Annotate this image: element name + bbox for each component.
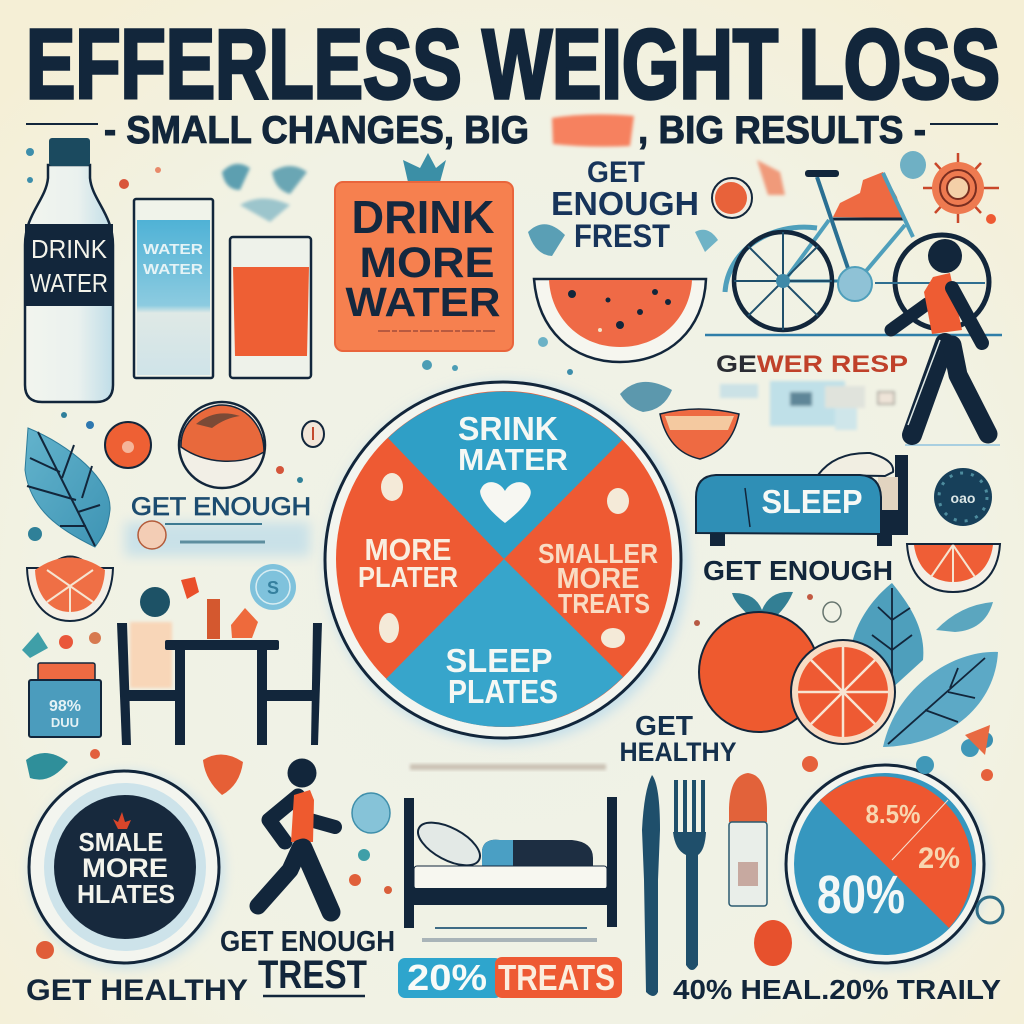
text: bottom stat line: 40% HEAL.20% TRAILY [673,974,1001,1005]
icon: plate with text [29,771,224,968]
icon: bicycle [725,170,989,330]
icon: teal bow [403,153,446,182]
icon: small leaf right [936,602,993,632]
icon: dark badge [934,468,992,526]
text: get enough trest [220,926,395,997]
text: get healthy right: GET [635,710,693,741]
icon: fruit group with leaves [699,583,998,747]
text: get enough trest: GET ENOUGH [220,926,395,958]
text: smaller more treats [538,538,658,619]
icon: tiny food items [379,473,629,648]
icon: plate with text: SMALE [78,827,164,857]
icon: plate with text: HLATES [77,879,175,909]
text: srink mater: SRINK [458,410,558,447]
text: sleep plates [446,642,558,710]
text: get enough frest: FREST [574,218,670,254]
text: sleep plates: SLEEP [446,642,552,679]
callout: 20% treats badge: 20% [407,957,487,998]
subtitle: - SMALL CHANGES, BIG [104,109,529,152]
icon: condiment bottle [729,773,767,906]
text: get healthy right [620,710,736,767]
text: srink mater [458,410,568,477]
text: get healthy right: HEALTHY [620,737,736,767]
icon: jar: DUU [51,715,79,730]
icon: food bowl [179,402,265,488]
icon: citrus half right [907,544,1000,592]
icon: faded device [720,381,894,430]
icon: half fruit [660,409,739,459]
text: smaller more treats: SMALLER [538,538,658,569]
icon: shell [620,382,672,412]
icon: blue leaf left [25,428,110,547]
text: get enough trest: TREST [258,953,367,997]
text: smaller more treats: TREATS [558,588,650,619]
icon: heart [480,482,531,523]
text: gewer resp: GE WER RESP [716,351,908,378]
text: smaller more treats: MORE [556,563,640,595]
chart: results pie: 80% [817,865,905,925]
text: more plater [358,532,458,594]
icon: fork [673,780,706,970]
icon: small round token [302,421,324,447]
icon: walking man [258,758,335,912]
subtitle [26,109,998,152]
icon: dining table with chairs [117,577,322,745]
icon: glass of water: WATER [143,241,203,258]
icon: blue coin: S [267,578,279,598]
icon: orange oval [754,920,792,966]
chart: results pie: 8.5% [866,799,920,829]
chart: results pie: 2% [918,842,960,875]
icon: blue coin [250,564,296,610]
icon: jar: 98% [49,698,81,715]
icon: plate with text: MORE [82,853,168,883]
icon: blue bed with sleep label: SLEEP [762,483,862,520]
icon: bed [404,797,617,942]
text: get enough right: GET ENOUGH [703,555,893,586]
panel: drink more water card: MORE [360,239,494,287]
icon: sun [923,153,999,224]
icon: knife [642,775,660,996]
text: get enough frest: ENOUGH [551,185,699,222]
icon: water bottle: WATER [30,268,108,298]
icon: scattered confetti [22,148,1003,959]
icon: citrus half left [27,556,113,621]
text: get enough left: GET ENOUGH [131,493,311,521]
chart: central plate wheel [325,382,688,744]
text: get healthy left: GET HEALTHY [26,974,248,1007]
panel: drink more water card: DRINK [352,191,494,243]
text: more plater: MORE [364,532,452,567]
text: srink mater: MATER [458,442,568,477]
icon: glass of juice [230,237,311,378]
chart: results pie [786,765,988,967]
icon: glass of water [134,199,213,378]
text: more plater: PLATER [358,562,458,594]
icon: water bottle: DRINK [31,234,108,264]
text: faded caption above bed [410,764,606,770]
callout: 20% treats badge: TREATS [498,957,615,998]
text: get enough frest [551,156,699,254]
panel: drink more water card: WATER [346,279,500,325]
icon: blue bed with sleep label [696,453,908,546]
icon: water bottle [25,138,113,402]
icon: dark ball [140,587,170,617]
callout: 20% treats badge [398,957,622,998]
text: get enough frest: GET [587,156,645,189]
icon: tomato [105,422,151,468]
subtitle: , BIG RESULTS - [638,109,926,152]
icon: walking woman [705,239,1002,445]
panel: drink more water card [335,182,513,351]
text: get enough left [125,493,311,556]
text: sleep plates: PLATES [448,673,558,710]
icon: glass of water: WATER [143,261,203,278]
icon: watermelon slice [534,279,706,362]
icon: teal disc [352,793,390,833]
icon: jar [29,663,101,737]
icon: dark badge: oao [951,490,975,506]
icon: small fruit circle [712,178,752,218]
